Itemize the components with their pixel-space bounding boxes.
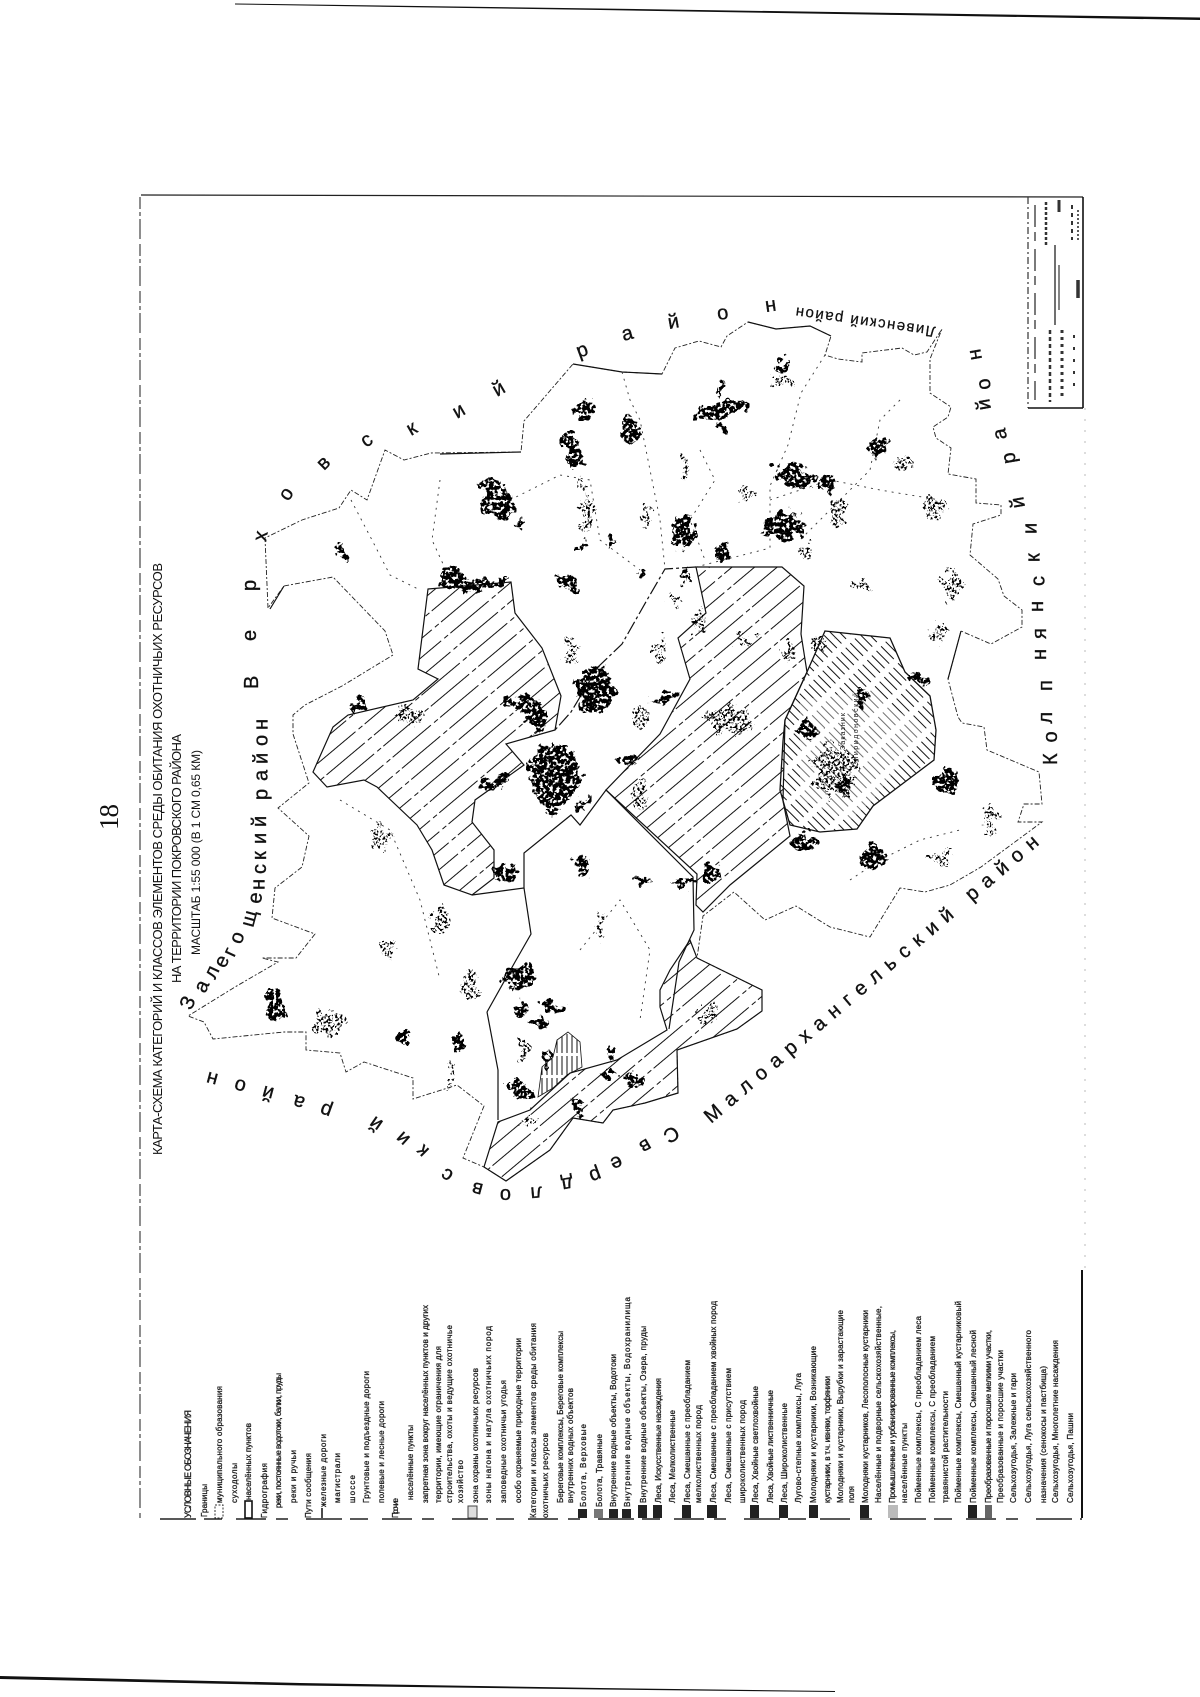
legend: habitat classes xyxy=(556,1296,1075,1507)
district label: Zalegoshch: Залегощенский район xyxy=(176,719,272,1013)
legend: habitat classes: Леса, Искусственные насаждения xyxy=(654,1378,663,1503)
legend: habitat categories heading: Категории и классы элементов среды обитания xyxy=(529,1323,538,1518)
legend: habitat classes: Береговые комплексы, Береговые комплексы xyxy=(556,1331,565,1503)
legend: habitat classes: Внутренние водные объекты, Водохранилища xyxy=(623,1296,632,1507)
legend: habitat classes: населённые пункты xyxy=(900,1423,909,1503)
legend: habitat classes: Молодняки кустарников, Лесополосные кустарники xyxy=(861,1310,870,1503)
legend: habitat classes: Преобразованные и поросшие мелкими участки, xyxy=(984,1330,993,1503)
legend: transport: магистрали xyxy=(333,1453,342,1503)
district label: Livny: Ливенский район xyxy=(795,303,937,340)
legend: habitat classes: кустарники, в т.ч. ивняки, торфяники xyxy=(823,1376,832,1503)
legend: habitat classes: Сельхозугодья, Луга сельскохозяйственного xyxy=(1024,1329,1033,1503)
legend: other: зона охраны охотничьих ресурсов xyxy=(471,1368,480,1503)
hatched zone D: southern tail xyxy=(484,940,762,1181)
legend: habitat classes: Лугово-степные комплексы, Луга xyxy=(794,1372,803,1503)
hatched zone C: nature reserve xyxy=(780,631,936,832)
legend: other: запретная зона вокруг населённых пунктов и других xyxy=(421,1305,430,1503)
reserve labels: Спиридоновский xyxy=(852,693,860,767)
dashed internal paths xyxy=(340,355,960,1020)
legend: habitat classes: Внутренние водные объекты, Озера, пруды xyxy=(639,1326,648,1503)
title: МАСШТАБ 1:55 000 (В 1 СМ 0,65 КМ) xyxy=(189,750,203,955)
lighter lower part of zone C xyxy=(800,690,925,820)
legend: hydrography: реки и ручьи xyxy=(289,1450,298,1503)
legend: habitat classes: Леса, Хвойные светлохвойные xyxy=(751,1385,760,1503)
legend heading: УСЛОВНЫЕ ОБОЗНАЧЕНИЯ xyxy=(183,1410,193,1518)
legend: transport: полевые и лесные дороги xyxy=(377,1401,386,1503)
district label: Kolpny: Колпнянский район xyxy=(963,347,1062,765)
legend: habitat classes: назначения (сенокосы и пастбища) xyxy=(1039,1366,1048,1503)
legend: habitat classes: Пойменные комплексы, Смешанный кустарниковый xyxy=(954,1301,963,1503)
legend: habitat classes: Молодняки и кустарники, Возникающие xyxy=(809,1345,818,1503)
legend: habitat classes: Сельхозугодья, Залежные и гари xyxy=(1009,1373,1018,1503)
legend: hydrography: реки, постоянные водотоки, балки, пруды xyxy=(274,1373,283,1508)
legend: habitat classes: Преобразованные и поросшие участки xyxy=(996,1350,1005,1503)
legend: other: строительства, охоты и ведущие охотничье xyxy=(445,1324,454,1503)
legend: habitat classes: Сельхозугодья, Пашни xyxy=(1066,1413,1075,1503)
reserve labels: Заказник xyxy=(840,712,847,750)
legend: habitat classes: травянистой растительности xyxy=(941,1391,950,1503)
legend: habitat classes: Внутренние водные объекты, Водотоки xyxy=(609,1354,618,1507)
title: КАРТА-СХЕМА КАТЕГОРИЙ И КЛАССОВ ЭЛЕМЕНТОВ СРЕДЫ ОБИТАНИЯ ОХОТНИЧЬИХ РЕСУРСОВ xyxy=(150,563,165,1155)
legend: habitat classes: широколиственных пород xyxy=(738,1400,747,1503)
legend: other: хозяйство xyxy=(456,1459,465,1503)
title xyxy=(150,563,203,1155)
scan edge: bottom page shadow xyxy=(0,1676,835,1692)
legend: other: населённые пункты xyxy=(406,1425,415,1500)
legend: other xyxy=(391,1305,523,1518)
legend: habitat classes: Леса, Смешанные с преобладанием xyxy=(683,1360,692,1503)
district label: Verkhovsky: Верховский район xyxy=(239,294,778,689)
legend: habitat classes: мелколиственных пород xyxy=(694,1405,703,1503)
legend: hydrography: Гидрография xyxy=(260,1463,269,1518)
legend: habitat classes: Болота, Травяные xyxy=(595,1433,604,1507)
legend: habitat classes: Пойменные комплексы, С преобладанием xyxy=(928,1336,937,1503)
legend: boundaries xyxy=(200,1386,253,1518)
internal boundaries xyxy=(472,567,696,1120)
legend: habitat classes: Леса, Смешанные с присутствием xyxy=(724,1368,733,1503)
legend: habitat swatches xyxy=(578,1505,992,1518)
legend: boundaries: Границы xyxy=(200,1484,209,1517)
legend: transport: железные дороги xyxy=(319,1434,328,1507)
page number: 18 xyxy=(94,804,124,830)
legend: habitat classes: поля xyxy=(847,1486,856,1503)
legend: habitat classes: Леса, Широколиственные xyxy=(780,1402,789,1503)
small table block: top right xyxy=(1028,197,1083,408)
legend: other: особо охраняемые природные территории xyxy=(514,1338,523,1503)
scattered forest specks xyxy=(316,376,997,1126)
legend: transport: Грунтовые и подъездные дороги xyxy=(362,1371,371,1503)
district outer boundary xyxy=(188,322,1042,1181)
legend: habitat classes: Пойменные комплексы, С преобладанием леса xyxy=(914,1315,923,1503)
legend xyxy=(183,1296,1075,1518)
legend: transport: Пути сообщения xyxy=(304,1453,313,1518)
scan edge: top page shadow xyxy=(235,4,1200,20)
legend: habitat classes: Леса, Мелколиственные xyxy=(668,1409,677,1503)
map xyxy=(188,322,1042,1181)
legend: habitat categories heading xyxy=(529,1323,550,1518)
vertically hatched arch zone xyxy=(538,1032,582,1097)
dense forest blobs xyxy=(265,353,962,1119)
legend: habitat classes: Пойменные комплексы, Смешанный лесной xyxy=(969,1330,978,1503)
legend: habitat classes: Болота, Верховые xyxy=(579,1423,588,1507)
legend: hydrography xyxy=(260,1373,298,1518)
legend: other: заповедные охотничьи угодья xyxy=(499,1380,508,1503)
solid boundary stretches xyxy=(270,322,961,679)
map frame xyxy=(140,195,1085,1519)
legend: habitat classes: внутренних водных объектов xyxy=(566,1388,575,1503)
legend: transport: шоссе xyxy=(348,1474,357,1503)
district label: Sverdlovsky: Свердловский район xyxy=(204,1067,683,1206)
legend: boundaries: суходолы xyxy=(230,1463,239,1503)
legend: habitat classes: Сельхозугодья, Многолетние насаждения xyxy=(1051,1340,1060,1503)
legend: habitat classes: Молодняки и кустарники, Вырубки и зарастающие xyxy=(836,1309,845,1503)
legend: other: территории, имеющие ограничения для xyxy=(434,1346,443,1503)
legend: habitat classes: Населённые и подворные сельскохозяйственные, xyxy=(874,1306,883,1503)
legend: habitat classes: Промышленные и урбанизированные комплексы, xyxy=(888,1330,897,1503)
reserve labels xyxy=(840,693,860,767)
legend: habitat classes: Леса, Хвойные лиственничные xyxy=(766,1389,775,1503)
hatched zone A xyxy=(313,582,561,895)
legend: other: зоны нагона и нагула охотничьих пород xyxy=(484,1326,493,1503)
legend: transport xyxy=(304,1371,386,1518)
legend: other: Прочие xyxy=(391,1497,400,1518)
legend: boundaries: муниципального образования xyxy=(215,1386,224,1503)
district label: Maloarkhangelsk: Малоархангельский район xyxy=(700,831,1043,1128)
legend: habitat categories heading: охотничьих ресурсов xyxy=(541,1433,550,1518)
legend: habitat classes: Леса, Смешанные с преобладанием хвойных пород xyxy=(709,1301,718,1503)
hatched zone B xyxy=(606,567,807,912)
title: НА ТЕРРИТОРИИ ПОКРОВСКОГО РАЙОНА xyxy=(169,734,184,983)
legend: boundaries: населённых пунктов xyxy=(244,1423,253,1500)
